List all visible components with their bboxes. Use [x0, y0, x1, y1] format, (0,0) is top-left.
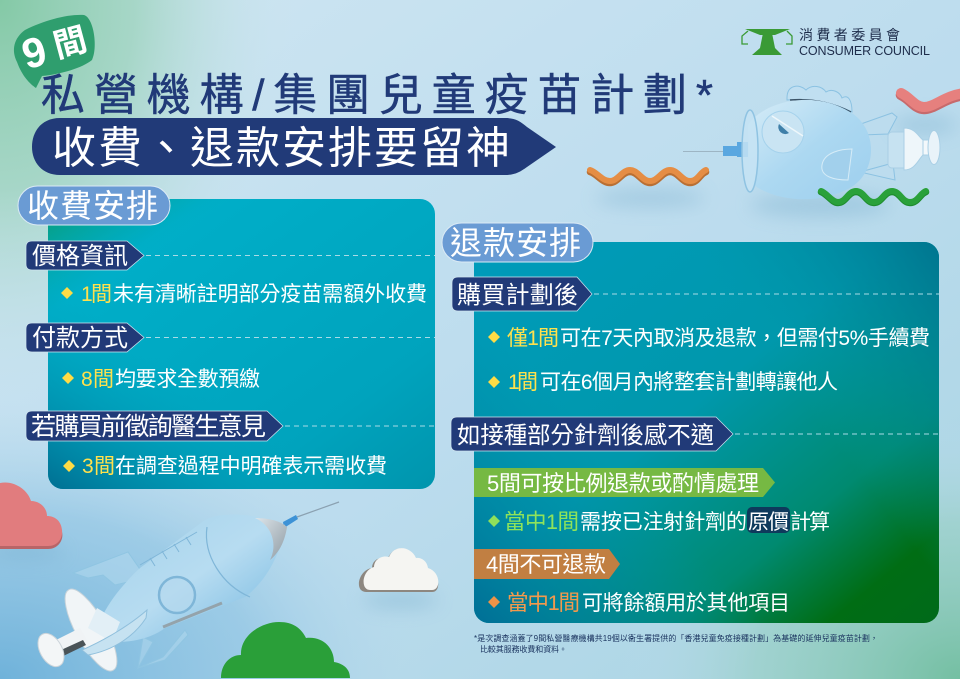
logo: Consumer Council — [742, 27, 930, 58]
plunger cap — [38, 632, 64, 668]
illustration: green cloud — [221, 622, 350, 678]
icon: scales — [742, 29, 792, 55]
bullet: 當中1間 原價: 當中1間 — [504, 510, 579, 534]
bullet: 僅1間: 可在7天內取消及退款，但需付5%手續費 — [560, 327, 930, 350]
nose cone line — [206, 527, 250, 597]
pill heading: 退款安排: 退款安排 — [450, 225, 581, 261]
tag: 價格資訊: 價格資訊 — [32, 243, 128, 270]
porthole — [159, 577, 195, 613]
nose — [255, 518, 287, 560]
hub — [283, 515, 298, 526]
bullet: 1間 轉讓: 1間 — [508, 371, 538, 394]
fin — [787, 86, 852, 112]
logo English name: CONSUMER COUNCIL — [799, 44, 930, 58]
plunger — [888, 128, 940, 170]
lower fin — [139, 631, 187, 665]
tag: 5間可按比例退款或酌情處理: 5間可按比例退款或酌情處理 — [487, 471, 759, 496]
tag: 若購買前徵詢醫生意見: 若購買前徵詢醫生意見 — [31, 413, 266, 441]
bullet: 當中1間 餘額 — [488, 591, 790, 615]
footnote: 比較其服務收費和資料。 — [480, 644, 567, 654]
banner heading: 收費、退款安排要留神 — [52, 124, 510, 173]
scale marks — [140, 532, 197, 566]
footnote: *是次調查涵蓋了9間私營醫療機構共19個以衞生署提供的「香港兒童免疫接種計劃」為基礎的延伸兒童疫苗計劃， — [474, 633, 878, 643]
bullet: 當中1間 餘額: 可將餘額用於其他項目 — [582, 592, 790, 615]
upper fin — [76, 552, 140, 584]
panel: refunds — [442, 223, 939, 623]
decoration: pink wave — [901, 93, 960, 109]
eye — [762, 111, 804, 153]
tag: 購買計劃後: 購買計劃後 — [457, 282, 578, 309]
hub — [723, 142, 748, 157]
bullet: 當中1間 餘額: 當中1間 — [507, 591, 580, 615]
illustration: white cloud — [359, 548, 438, 592]
title: 私營機構/集團兒童疫苗計劃* — [41, 71, 713, 120]
bullet: 1間 轉讓: 可在6個月內將整套計劃轉讓他人 — [540, 371, 838, 394]
front fin — [82, 610, 147, 655]
decoration: green wave — [821, 191, 926, 203]
bullet: 8間: 8間 — [81, 368, 114, 391]
bullet: 1間: 未有清晰註明部分疫苗需額外收費 — [113, 283, 427, 306]
logo Chinese name: 消費者委員會 — [799, 27, 900, 43]
needle — [297, 502, 339, 517]
rim — [742, 110, 758, 192]
bullet: 當中1間 原價 — [488, 507, 830, 534]
flange — [64, 588, 118, 672]
decoration: orange wave — [590, 170, 706, 183]
bullet: 1間: 1間 — [81, 283, 112, 306]
bullet: 當中1間 原價: 原價 — [748, 511, 789, 534]
icon: speech bubble 9間: 間 — [49, 20, 91, 65]
tag: 如接種部分針劑後感不適 — [451, 417, 733, 451]
illustration: rocket syringe — [33, 502, 339, 678]
barrel — [103, 515, 285, 642]
illustration: pink cloud — [0, 482, 62, 549]
tail — [858, 113, 897, 180]
tag: 4間不可退款 — [474, 549, 620, 579]
body — [748, 100, 871, 199]
bullet: 3間: 3間 — [82, 455, 115, 478]
bullet: 8間: 均要求全數預繳 — [115, 368, 260, 391]
tag: 付款方式: 付款方式 — [32, 325, 128, 352]
bullet: 僅1間: 僅1間 — [507, 327, 559, 350]
illustration: fish syringe — [683, 86, 940, 199]
tag: 如接種部分針劑後感不適: 如接種部分針劑後感不適 — [457, 422, 714, 448]
bottom strip — [163, 603, 222, 627]
needle — [683, 150, 725, 152]
panel: fees — [18, 186, 435, 489]
tag: 4間不可退款: 4間不可退款 — [486, 552, 606, 577]
soft shadows — [0, 116, 957, 609]
tag: 購買計劃後 — [452, 277, 592, 311]
bullet: 3間: 在調查過程中明確表示需收費 — [115, 455, 387, 478]
mouth — [822, 149, 852, 180]
bullet: 當中1間 原價: 計算 — [790, 511, 830, 534]
threads — [88, 608, 120, 638]
pill heading: 收費安排: 收費安排 — [27, 188, 158, 224]
bullet: 當中1間 原價: 需按已注射針劑的 — [580, 511, 747, 534]
plunger rod — [58, 630, 80, 649]
icon: speech bubble 9間: 9 — [17, 27, 51, 78]
footnote — [474, 633, 878, 654]
icon: speech bubble 9間 — [14, 15, 95, 88]
